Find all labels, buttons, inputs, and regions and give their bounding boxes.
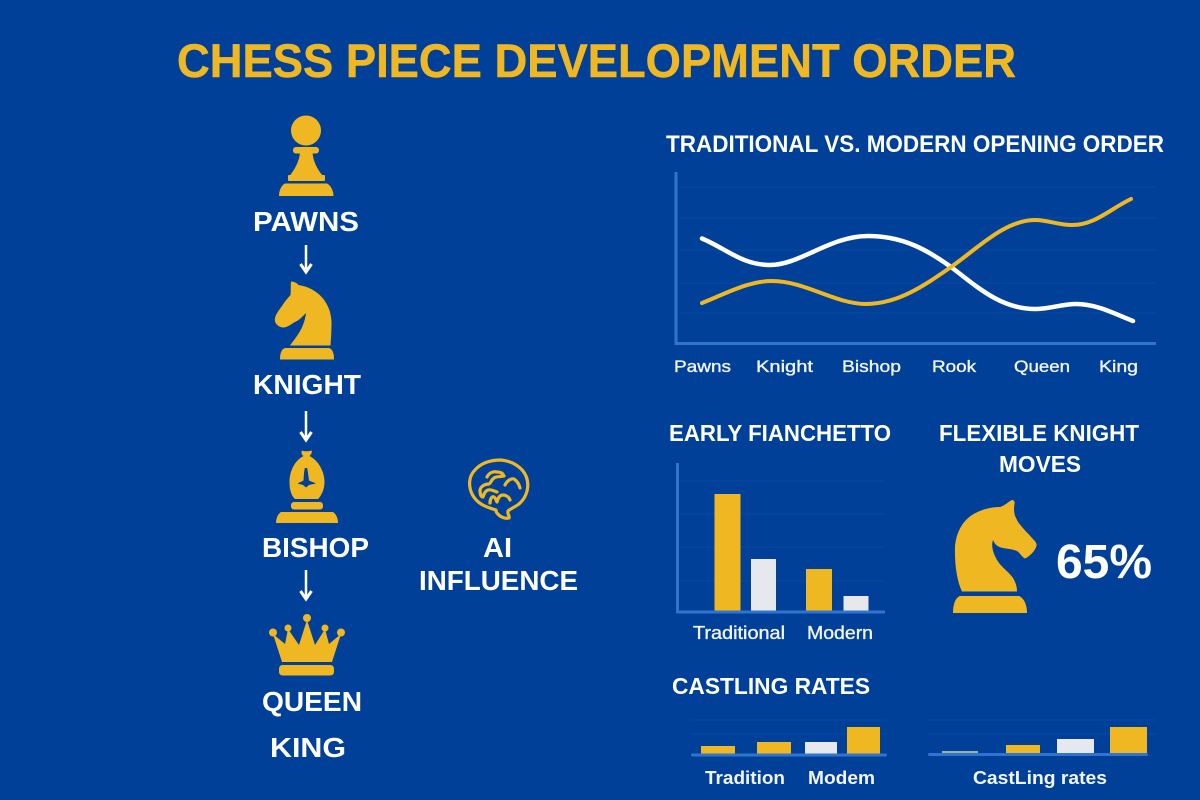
bars xyxy=(942,727,1147,754)
panel: flexible knight moves xyxy=(939,420,1152,613)
axis labels: Knight xyxy=(756,357,813,376)
axis labels: Tradition xyxy=(705,768,785,788)
chart axes xyxy=(676,172,1156,344)
axis labels: King xyxy=(1099,357,1138,376)
label: king: KING xyxy=(270,732,346,763)
label: bishop: BISHOP xyxy=(262,532,369,563)
stat: 65%: 65% xyxy=(1056,536,1152,589)
axis labels xyxy=(705,768,875,788)
bars xyxy=(701,727,880,754)
icon: bishop xyxy=(276,450,338,523)
bars xyxy=(714,494,868,610)
axis labels: Modern xyxy=(807,623,873,643)
arrow: knight to bishop xyxy=(300,411,312,440)
series: modern line xyxy=(702,236,1133,321)
heading: FLEXIBLE KNIGHT xyxy=(939,420,1139,446)
heading: MOVES xyxy=(999,451,1081,477)
line chart: traditional vs modern xyxy=(674,172,1156,376)
icon: pawn xyxy=(279,116,334,196)
axis labels xyxy=(693,623,873,643)
axis labels: Rook xyxy=(932,357,977,376)
axis labels xyxy=(674,357,1138,376)
axis labels: Modem xyxy=(808,768,875,788)
label: queen: QUEEN xyxy=(262,686,362,717)
panel: development order flow xyxy=(253,116,369,763)
axis labels: Bishop xyxy=(842,357,901,376)
heading: early fianchetto: EARLY FIANCHETTO xyxy=(669,420,891,446)
axis label: CastLing rates xyxy=(973,768,1107,788)
icon: crown xyxy=(269,614,345,676)
label: influence: INFLUENCE xyxy=(419,565,578,596)
series: traditional line xyxy=(702,199,1131,304)
axis labels: Queen xyxy=(1014,357,1070,376)
icon: knight xyxy=(953,500,1037,613)
baseline xyxy=(928,753,1148,756)
title: CHESS PIECE DEVELOPMENT ORDER xyxy=(177,34,1016,87)
baseline xyxy=(691,754,887,756)
axis labels: Pawns xyxy=(674,357,731,376)
arrow: bishop to queen xyxy=(300,570,312,599)
panel: AI influence xyxy=(419,460,578,596)
icon: brain xyxy=(470,460,528,518)
heading xyxy=(939,420,1139,477)
label: knight: KNIGHT xyxy=(253,369,361,400)
axis labels: Traditional xyxy=(693,623,785,643)
label: pawns: PAWNS xyxy=(253,206,359,237)
chart axes xyxy=(678,463,885,612)
heading: castling rates: CASTLING RATES xyxy=(672,673,870,699)
heading: line chart: TRADITIONAL VS. MODERN OPENING ORDER xyxy=(666,131,1164,158)
bar chart: castling tradition vs modern xyxy=(690,720,887,788)
arrow: pawns to knight xyxy=(300,245,312,272)
bar chart: castling rates xyxy=(928,720,1156,788)
label: AI: AI xyxy=(483,532,512,563)
icon: knight xyxy=(275,282,334,360)
bar chart: early fianchetto xyxy=(678,463,885,643)
